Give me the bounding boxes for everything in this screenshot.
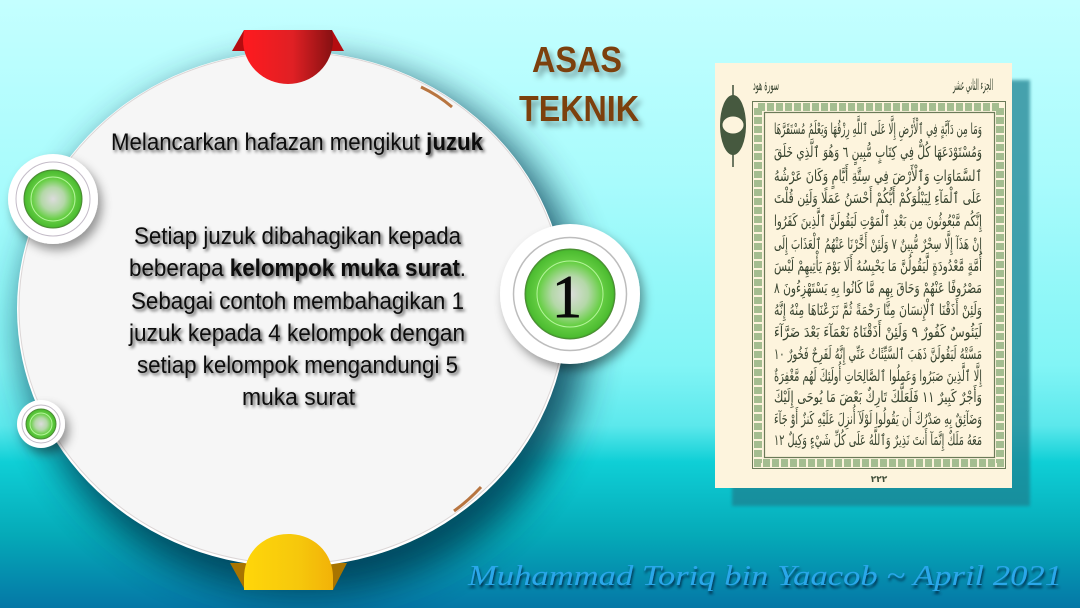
quran text lines: مَسَّتْهُ لَيَقُولَنَّ ذَهَبَ ٱلسَّيِّئَاتُ عَنِّي إِنَّهُ لَفَرِحٌ فَخُورٌ ١٠ [774, 345, 982, 366]
title: ASAS [532, 39, 622, 80]
ornament: side medallion [720, 85, 746, 167]
number badge: 1 [500, 224, 640, 364]
quran page: الجزء الثاني عشر [953, 76, 993, 95]
quran page [715, 63, 1012, 488]
quran text lines: وَمُسْتَوْدَعَهَا كُلٌّ فِي كِتَابٍ مُّبِينٍ ٦ وَهُوَ ٱلَّذِي خَلَقَ [774, 138, 982, 165]
quran text lines: إِنْ هَذَآ إِلَّا سِحْرٌ مُّبِينٌ ٧ وَلَئِنْ أَخَّرْنَا عَنْهُمُ ٱلْعَذَابَ إِلَى [774, 231, 982, 256]
quran text lines: أُمَّةٍ مَّعْدُودَةٍ لَّيَقُولُنَّ مَا يَحْبِسُهُ أَلَا يَوْمَ يَأْتِيهِمْ لَيْسَ [774, 251, 982, 278]
quran text lines: لَيَئُوسٌ كَفُورٌ ٩ وَلَئِنْ أَذَقْنَاهُ نَعْمَآءَ بَعْدَ ضَرَّآءَ [774, 319, 982, 341]
ornamental frame [752, 102, 1006, 468]
red semicircle tab [243, 30, 333, 84]
bullet: green lower left [17, 400, 65, 448]
accent: brown arc mark bottom right [454, 487, 481, 511]
quran text lines: إِنَّكُم مَّبْعُوثُونَ مِن بَعْدِ ٱلْمَوْتِ لَيَقُولَنَّ ٱلَّذِينَ كَفَرُوا [774, 208, 982, 233]
quran page image shadow [732, 80, 1030, 506]
text block: explanation: beberapa kelompok muka surat. [129, 255, 466, 282]
quran text lines [774, 116, 982, 452]
page number: ٢٢٢ [871, 475, 888, 485]
heading: melancarkan: Melancarkan hafazan mengikut juzuk [111, 129, 484, 156]
footer author credit: Muhammad Toriq bin Yaacob ~ April 2021 [467, 560, 1062, 592]
number badge: 1: 1 [552, 264, 582, 330]
quran text lines: وَأَجْرٌ كَبِيرٌ ١١ فَلَعَلَّكَ تَارِكٌ بَعْضَ مَا يُوحَى إِلَيْكَ [774, 384, 982, 409]
bullet: green upper left [8, 154, 98, 244]
text block: explanation: setiap kelompok mengandungi 5 [137, 352, 458, 379]
quran text lines: عَلَى ٱلْمَآءِ لِيَبْلُوَكُمْ أَيُّكُمْ أَحْسَنُ عَمَلًا وَلَئِن قُلْتَ [774, 185, 982, 207]
title: TEKNIK [519, 88, 639, 129]
quran text lines: ٱلسَّمَاوَاتِ وَٱلْأَرْضَ فِي سِتَّةِ أَيَّامٍ وَكَانَ عَرْشُهُ [774, 163, 982, 189]
quran text lines: وَلَئِنْ أَذَقْنَا ٱلْإِنسَانَ مِنَّا رَحْمَةً ثُمَّ نَزَعْنَاهَا مِنْهُ إِنَّهُ [774, 297, 982, 322]
main panel: ribbon wings and white ellipse [17, 30, 567, 590]
quran text lines: مَصْرُوفًا عَنْهُمْ وَحَاقَ بِهِم مَّا كَانُوا بِهِ يَسْتَهْزِءُونَ ٨ [774, 279, 982, 300]
title [519, 39, 639, 129]
text block: explanation [128, 223, 466, 411]
accent: brown arc mark top right [421, 87, 452, 107]
text block: explanation: Setiap juzuk dibahagikan kepada [134, 223, 462, 250]
text block: explanation: Sebagai contoh membahagikan 1 [131, 288, 464, 315]
circle shadow [23, 62, 587, 594]
text block: explanation: juzuk kepada 4 kelompok dengan [128, 320, 465, 347]
text block: explanation: muka surat [242, 384, 355, 411]
quran page: سورة هود [753, 76, 779, 94]
yellow semicircle tab [244, 534, 333, 590]
